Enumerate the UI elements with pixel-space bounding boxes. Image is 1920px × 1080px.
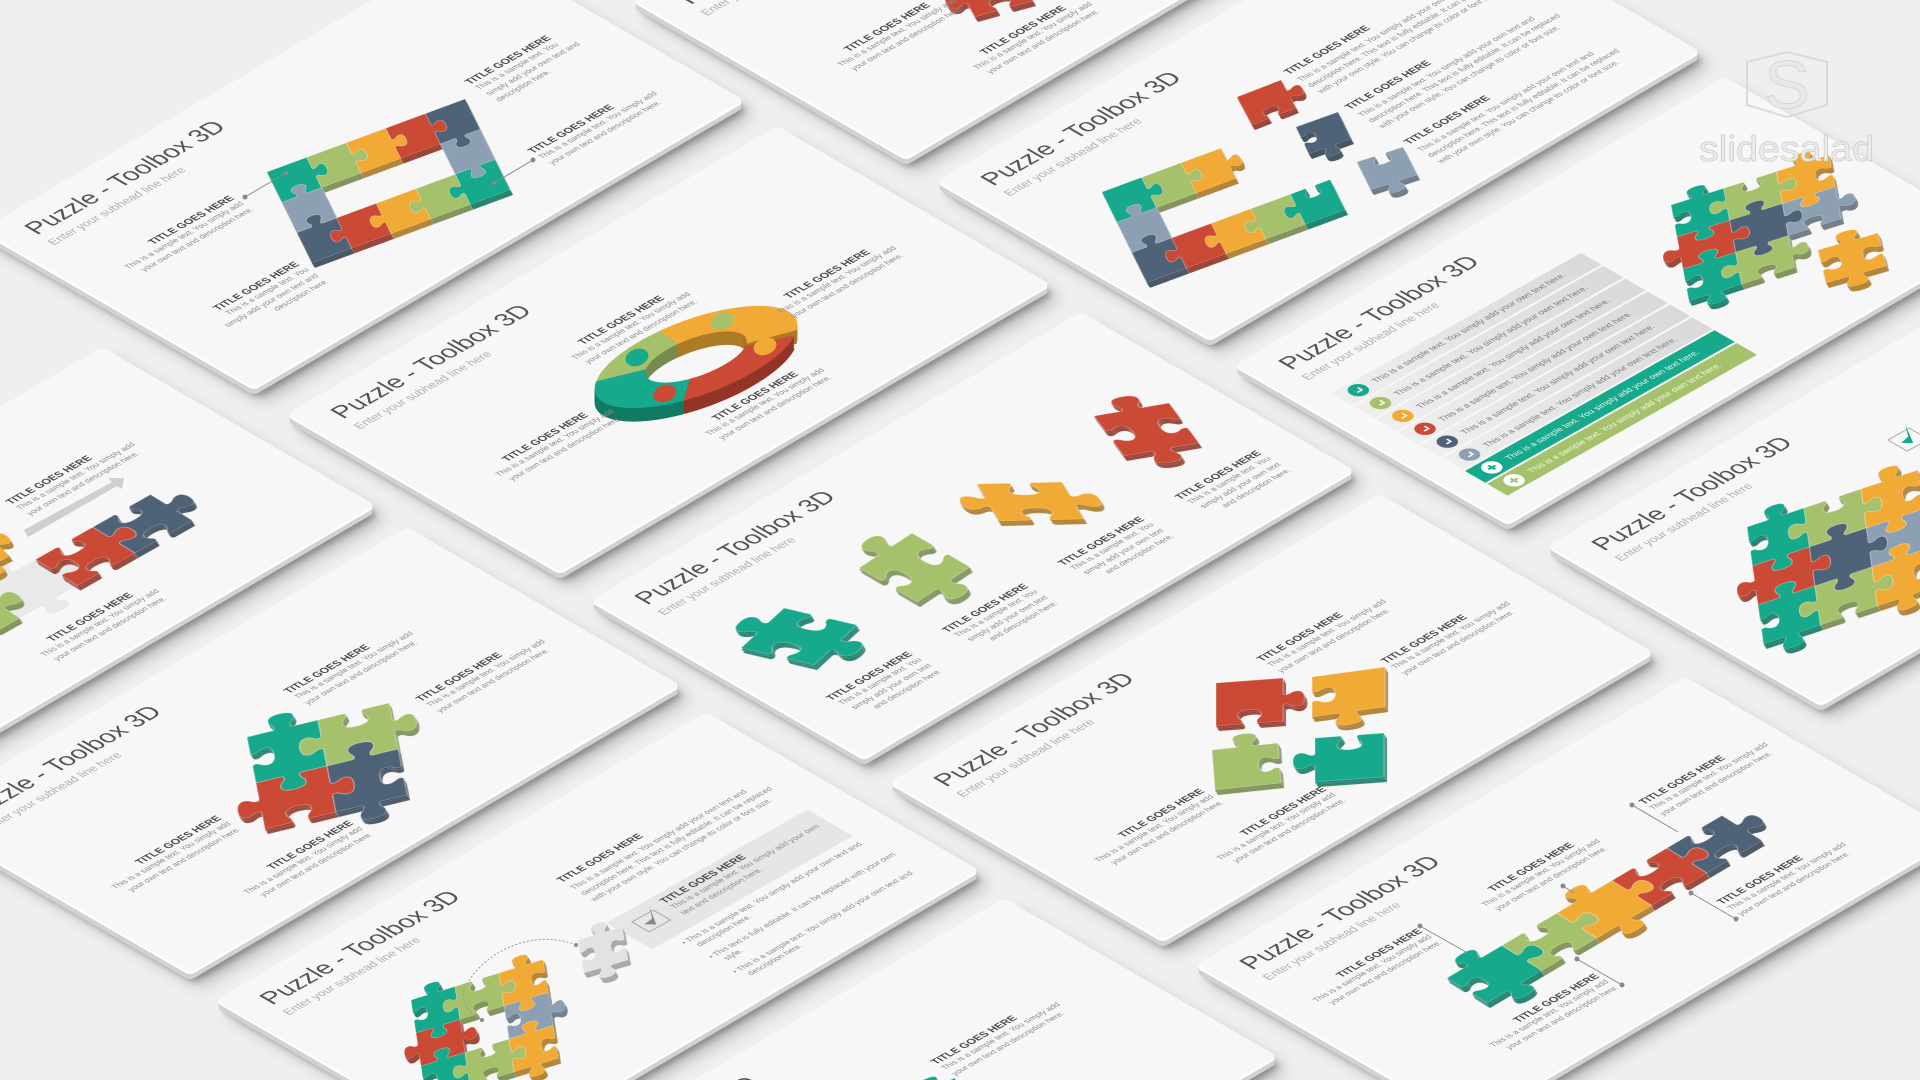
- text block: with your own style. You can change its color or font size.: [587, 797, 774, 903]
- text block: This is a sample text. You: [836, 657, 924, 706]
- text block: This is a sample text. You simply add: [424, 638, 547, 708]
- text block: simply add your own text: [965, 594, 1051, 643]
- checklist row 8: [1487, 343, 1757, 496]
- panel: rectangle ring slide: [0, 0, 744, 388]
- puzzle piece: orange: [950, 481, 1111, 522]
- bullet text: • This is a sample text. You simply add your own text and: [730, 870, 915, 975]
- slide heading: Enter your subhead line here: [654, 535, 800, 617]
- text block: TITLE GOES HERE: [710, 371, 802, 422]
- text block: TITLE GOES HERE: [1255, 612, 1346, 663]
- slide heading and checklist: Puzzle - Toolbox 3D: [1273, 252, 1487, 373]
- slide card: [287, 126, 1050, 572]
- text block: your own text and description here.: [1657, 750, 1775, 817]
- bullet text: description here.: [694, 914, 754, 948]
- checklist row 7: [1465, 330, 1735, 483]
- dotted path arrow: [463, 939, 578, 1022]
- text block: This is a sample text. You simply add: [1265, 598, 1388, 668]
- icon: check box: [627, 907, 671, 932]
- text block: your own text and description here.: [546, 99, 664, 166]
- text block: TITLE GOES HERE: [1511, 973, 1603, 1024]
- panel: split quartet slide: [890, 494, 1653, 940]
- text block: with your own style. You can change its color or font size.: [1375, 24, 1562, 130]
- bullet text: description here.: [745, 943, 805, 977]
- text block: This is a sample text. You: [1068, 522, 1156, 571]
- checklist row 3: This is a sample text. You simply add your own text here.: [1414, 297, 1613, 410]
- callout text: This is a sample text. You simply add your own: [668, 823, 822, 910]
- text block: TITLE GOES HERE: [555, 833, 646, 884]
- text block: your own text and description here.: [788, 252, 906, 319]
- loose piece: navy: [1296, 112, 1355, 163]
- text block: description here. This text is fully editable. It can be replaced: [1366, 13, 1563, 124]
- text block: and description here.: [1102, 533, 1176, 575]
- text block: This is a sample text. You simply add: [536, 90, 659, 160]
- checklist row 5: This is a sample text. You simply add your own text here.: [1458, 323, 1657, 436]
- text block: TITLE GOES HERE: [842, 2, 934, 53]
- slide card: [937, 0, 1700, 339]
- connectors: [1418, 802, 1738, 988]
- slide card: [0, 347, 375, 793]
- text block: description here. This text is fully editable. It can be replaced: [578, 786, 775, 897]
- slide heading: [671, 0, 901, 18]
- text block: your own text and description here.: [302, 639, 420, 706]
- loose piece: red: [1237, 75, 1310, 125]
- text block: This is a sample text. You simply add your own text and: [1356, 16, 1537, 118]
- checklist row 1: [1332, 253, 1601, 405]
- text block: your own text and description here.: [1230, 797, 1348, 864]
- text block: your own text and description here.: [138, 206, 256, 273]
- text block: This is a sample text. You simply add: [1310, 934, 1434, 1003]
- checklist row 6: This is a sample text. You simply add your own text here.: [1480, 336, 1679, 448]
- text block: your own text and description here.: [984, 8, 1102, 75]
- text block: [463, 29, 592, 103]
- slide heading and callout: Enter your subhead line here: [279, 935, 425, 1017]
- puzzle piece: red: [1216, 676, 1304, 726]
- ghost puzzle piece: [0, 541, 109, 626]
- text block: with your own style. You can change its color or font size.: [1434, 59, 1621, 165]
- text block: TITLE GOES HERE: [500, 412, 592, 463]
- puzzle piece: teal: [718, 603, 880, 670]
- checklist row 2: This is a sample text. You simply add your own text here.: [1391, 284, 1590, 397]
- text block: your own text and description here.: [125, 826, 243, 893]
- panel: two by two puzzle slide: [0, 527, 680, 973]
- text block: TITLE GOES HERE: [414, 652, 505, 703]
- text block: TITLE GOES HERE: [526, 104, 617, 155]
- text block: TITLE GOES HERE: [265, 820, 357, 871]
- text block: your own text and description here.: [848, 5, 966, 72]
- text block: This is a sample text. You: [223, 267, 311, 316]
- slide card: [1548, 258, 1920, 704]
- loose piece: ghost: [576, 916, 630, 984]
- puzzle piece: orange: [0, 515, 32, 584]
- callout text: TITLE GOES HERE: [658, 854, 749, 905]
- text block: TITLE GOES HERE: [45, 592, 137, 643]
- text block: This is a sample text. You simply add: [14, 441, 137, 511]
- checklist row 4: This is a sample text. You simply add your own text here.: [1436, 310, 1635, 423]
- checklist row 4: [1398, 292, 1668, 444]
- text block: your own text and description here.: [24, 450, 142, 517]
- text block: [1056, 515, 1177, 584]
- slide heading: Puzzle - Toolbox 3D: [928, 669, 1142, 790]
- text block: This is a sample text. You simply add your own text and: [1415, 51, 1596, 153]
- text block: This is a sample text. You simply add: [38, 588, 162, 658]
- text block: TITLE GOES HERE: [133, 815, 225, 866]
- text block: This is a sample text. You simply add: [971, 1, 1095, 71]
- text block: simply add your own text: [1198, 461, 1284, 510]
- text block: This is a sample text. You simply add: [1725, 841, 1848, 911]
- slide card: [0, 0, 744, 388]
- puzzle piece: green: [840, 522, 989, 613]
- checklist row 2: [1354, 266, 1623, 418]
- puzzle U shape: [1102, 119, 1345, 283]
- slide heading and callout: Puzzle - Toolbox 3D: [254, 887, 468, 1008]
- text block: This is a sample text. You simply add: [1389, 600, 1512, 670]
- slide heading and checklist: [1272, 219, 1757, 496]
- text block: your own text and description here.: [1735, 850, 1853, 917]
- text block: your own text and description here.: [1503, 984, 1621, 1051]
- text block: your own text and description here.: [1326, 939, 1444, 1006]
- panel: missing piece slide: [216, 712, 979, 1080]
- slide heading: Puzzle - Toolbox 3D: [1234, 852, 1448, 973]
- slide card: [591, 312, 1354, 758]
- slide heading and checklist: Enter your subhead line here: [1298, 300, 1444, 382]
- text block: This is a sample text. You simply add: [1214, 792, 1338, 861]
- text block: TITLE GOES HERE: [1379, 614, 1470, 665]
- panel: donut slide: [287, 126, 1050, 572]
- panel: four jigsaw pieces slide: [591, 312, 1354, 758]
- text block: your own text and description here.: [1399, 609, 1517, 676]
- text block: your own text and description here.: [506, 415, 624, 482]
- slide heading: Enter your subhead line here: [1611, 481, 1757, 563]
- text block: TITLE GOES HERE: [1334, 928, 1426, 979]
- panel: left chain slide: [0, 347, 375, 793]
- puzzle grid: [1727, 451, 1920, 663]
- text block: This is a sample text. You simply add: [241, 826, 365, 895]
- slide card: [890, 494, 1653, 940]
- puzzle piece: red: [1084, 390, 1209, 469]
- text block: simply add your own text and: [483, 41, 582, 97]
- text block: TITLE GOES HERE: [282, 644, 373, 695]
- puzzle ring: [267, 99, 510, 263]
- text block: This is a sample text. You simply add: [1487, 979, 1611, 1048]
- text block: This is a sample text. You simply add: [1092, 794, 1216, 863]
- slide card: [633, 0, 1396, 158]
- text block: TITLE GOES HERE: [576, 295, 668, 346]
- panel: checklist slide: [1235, 77, 1920, 523]
- loose piece: orange: [1815, 222, 1889, 294]
- slide card: [1235, 77, 1920, 523]
- slide heading: Puzzle - Toolbox 3D: [325, 301, 539, 422]
- text block: your own text and description here.: [949, 1010, 1067, 1077]
- text block: TITLE GOES HERE: [1486, 842, 1578, 893]
- slide heading: Enter your subhead line here: [1259, 900, 1405, 982]
- bullet text: • This text is fully editable. It can be replaced with your own: [706, 851, 898, 960]
- checklist row 3: [1376, 279, 1646, 431]
- text block: your own text and description here.: [257, 831, 375, 898]
- text block: This is a sample text. You simply add: [775, 245, 899, 315]
- icon: check box: [1883, 425, 1920, 451]
- text block: TITLE GOES HERE: [1238, 786, 1330, 837]
- checklist row 1: This is a sample text. You simply add your own text here.: [1369, 272, 1568, 384]
- slide heading: Puzzle - Toolbox 3D: [19, 117, 233, 238]
- panel: bottom centre slide: [514, 898, 1277, 1080]
- text block: TITLE GOES HERE: [978, 5, 1070, 56]
- text block: TITLE GOES HERE: [1402, 95, 1493, 146]
- slide card: [514, 898, 1277, 1080]
- text block: and description here.: [986, 600, 1060, 642]
- logo: watermark: S: [1764, 47, 1810, 123]
- connector left: [242, 171, 288, 200]
- loose piece: grey: [1357, 147, 1421, 199]
- puzzle piece: orange: [1312, 667, 1385, 730]
- text block: and description here.: [1219, 467, 1293, 509]
- text block: your own text and description here.: [1275, 607, 1393, 674]
- text block: TITLE GOES HERE: [1637, 755, 1728, 806]
- panel: linked chain slide: [1196, 677, 1920, 1080]
- puzzle cluster: [1652, 139, 1866, 317]
- slide heading: Puzzle - Toolbox 3D: [629, 487, 843, 608]
- text block: TITLE GOES HERE: [782, 249, 874, 300]
- puzzle donut: [585, 286, 807, 428]
- text block: TITLE GOES HERE: [1116, 788, 1208, 839]
- text block: simply add your own text: [1081, 527, 1167, 576]
- text block: This is a sample text. You: [473, 41, 561, 91]
- slide heading and callout: [253, 745, 853, 1080]
- slide card: [216, 712, 979, 1080]
- text block: your own text and description here.: [434, 647, 552, 714]
- text block: TITLE GOES HERE: [1282, 25, 1373, 76]
- text block: This is a sample text. You: [1185, 456, 1273, 505]
- text block: description here. This text is fully editable. It can be replaced: [1425, 48, 1622, 159]
- checklist row 8: This is a sample text. You simply add your own text here.: [1525, 362, 1724, 474]
- text block: This is a sample text. You simply add: [122, 201, 246, 270]
- text block: This is a sample text. You simply add: [569, 291, 693, 361]
- text block: [1173, 449, 1294, 518]
- text block: your own text and description here.: [716, 374, 834, 441]
- slide card: [1196, 677, 1920, 1080]
- text block: This is a sample text. You simply add: [1479, 838, 1603, 908]
- text block: [824, 650, 945, 719]
- slide heading: Enter your subhead line here: [350, 349, 496, 431]
- panel: top centre slide: [633, 0, 1396, 158]
- puzzle with gap: [395, 945, 574, 1080]
- text block: TITLE GOES HERE: [1173, 450, 1265, 501]
- puzzle chain: [0, 484, 211, 650]
- text block: your own text and description here.: [51, 595, 169, 662]
- panel: far right puzzle slide: [1548, 258, 1920, 704]
- text block: TITLE GOES HERE: [146, 195, 238, 246]
- callout text: text and description here.: [678, 867, 765, 916]
- text block: This is a sample text. You: [952, 589, 1040, 638]
- puzzle piece: teal: [902, 1068, 968, 1080]
- puzzle piece: red: [936, 0, 1052, 22]
- bullet text: • This is a sample text. You simply add your own text and: [679, 841, 864, 946]
- text block: TITLE GOES HERE: [929, 1015, 1020, 1066]
- text block: simply add your own text: [849, 662, 935, 711]
- text block: This is a sample text. You simply add: [1647, 741, 1770, 811]
- text block: and description here.: [870, 668, 944, 710]
- puzzle two by two: [221, 683, 433, 849]
- checklist row 6: [1443, 317, 1712, 470]
- slide heading: Puzzle - Toolbox 3D: [1586, 433, 1800, 554]
- logo: watermark: slidesalad: [1699, 128, 1874, 169]
- text block: your own text and description here.: [1492, 845, 1610, 912]
- slide heading: Puzzle - Toolbox 3D: [975, 68, 1189, 189]
- text block: This is a sample text. You simply add: [703, 367, 827, 437]
- text block: TITLE GOES HERE: [1715, 855, 1806, 906]
- text block: This is a sample text. You simply add: [493, 408, 617, 478]
- arrow: [24, 478, 124, 537]
- text block: TITLE GOES HERE: [940, 583, 1032, 634]
- text block: TITLE GOES HERE: [463, 35, 554, 86]
- slide heading: Enter your subhead line here: [1000, 116, 1146, 198]
- text block: TITLE GOES HERE: [211, 261, 303, 312]
- text block: This is a sample text. You simply add your own text and: [568, 789, 749, 891]
- text block: TITLE GOES HERE: [4, 455, 95, 506]
- text block: TITLE GOES HERE: [824, 651, 916, 702]
- puzzle piece: green: [1211, 730, 1281, 790]
- text block: your own text and description here.: [1108, 799, 1226, 866]
- text block: TITLE GOES HERE: [1343, 60, 1434, 111]
- slide heading: Enter your subhead line here: [953, 717, 1099, 799]
- bullet text: style.: [721, 948, 745, 962]
- text block: simply add your own text and: [222, 272, 321, 328]
- text block: This is a sample text. You simply add: [292, 630, 415, 700]
- slide card: [0, 527, 680, 973]
- text block: description here.: [271, 278, 331, 312]
- text block: TITLE GOES HERE: [1056, 516, 1148, 567]
- slide heading: Enter your subhead line here: [44, 165, 190, 247]
- puzzle piece: teal: [1293, 733, 1384, 784]
- logo: watermark: [1699, 47, 1874, 169]
- text block: description here.: [493, 69, 553, 103]
- text block: [202, 261, 331, 334]
- connector right: [492, 158, 536, 185]
- panel: U-shape slide: [937, 0, 1700, 339]
- text block: This is a sample text. You simply add: [939, 1001, 1062, 1071]
- text block: [940, 582, 1061, 651]
- callout panel: [607, 810, 853, 949]
- puzzle chain: [1434, 797, 1792, 1011]
- text block: This is a sample text. You simply add: [109, 821, 233, 890]
- checklist row 7: This is a sample text. You simply add your own text here.: [1503, 349, 1702, 461]
- text block: your own text and description here.: [582, 298, 700, 365]
- checklist row 5: [1421, 304, 1690, 457]
